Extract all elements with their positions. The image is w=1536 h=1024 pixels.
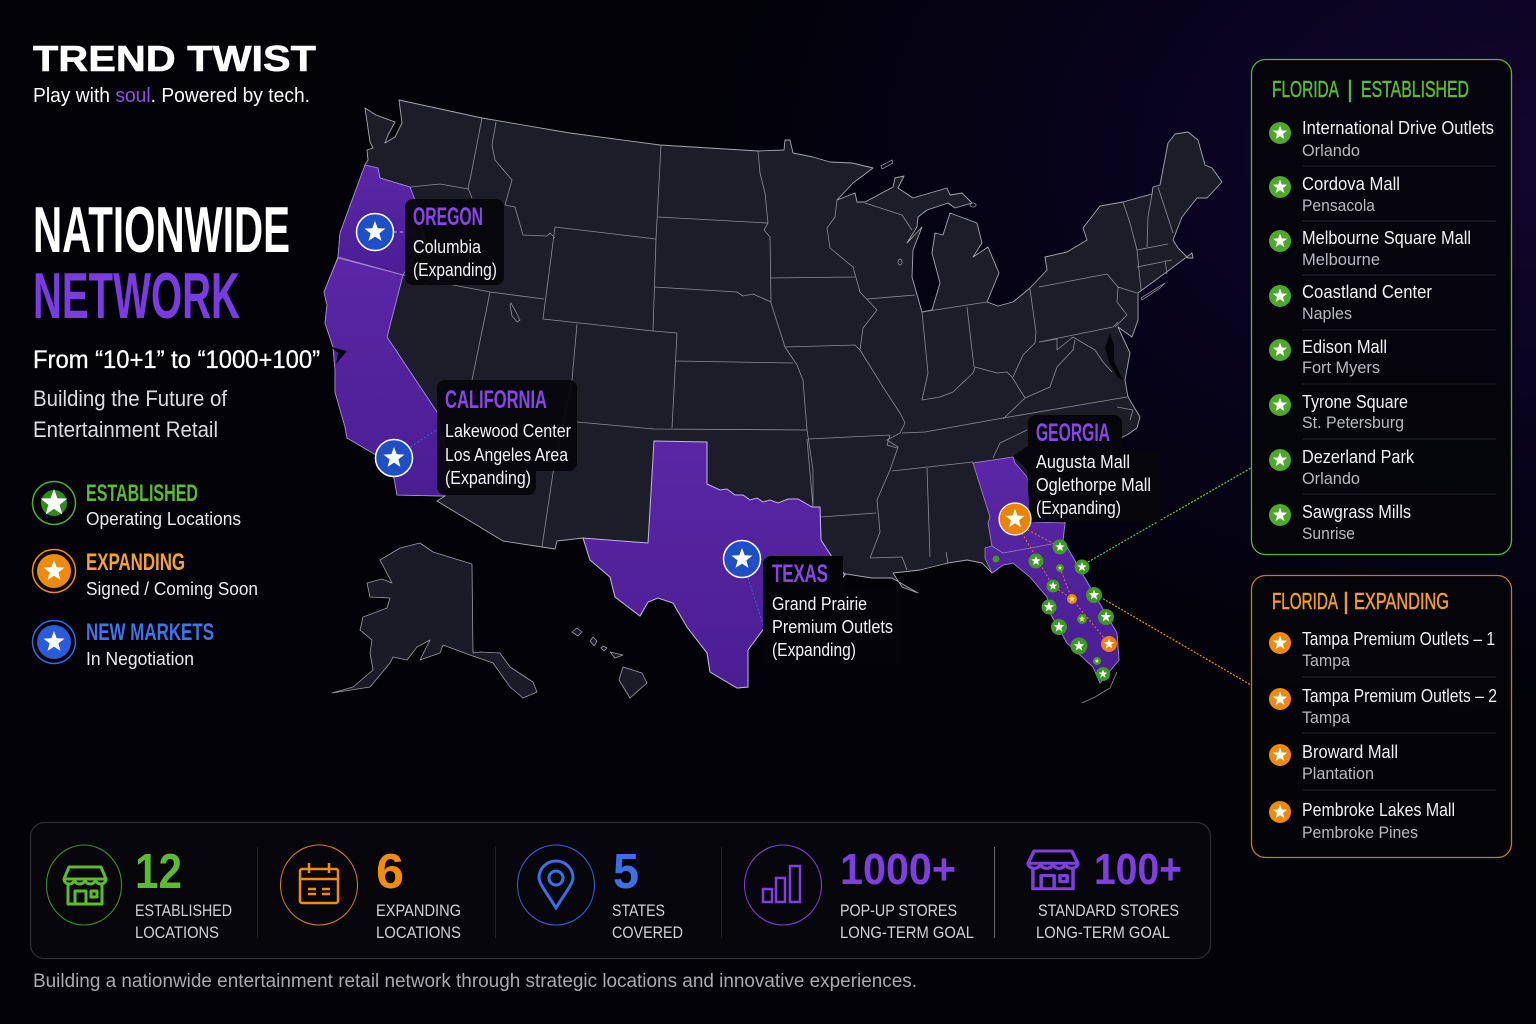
San Francisco bay notch — [331, 347, 347, 364]
legend item: expanding — [32, 549, 258, 599]
pin: Texas — [724, 540, 760, 578]
location list: Sunrise — [1302, 524, 1355, 543]
stat: states covered — [518, 845, 683, 942]
callout: California: (Expanding) — [445, 468, 531, 488]
callout: California: CALIFORNIA — [445, 386, 547, 414]
title: Nationwide Network — [33, 193, 290, 332]
callout: Oregon — [405, 199, 504, 285]
panel: Florida established — [1252, 60, 1512, 554]
location list: Coastland Center — [1302, 282, 1432, 302]
Chesapeake Bay — [1105, 333, 1124, 380]
location list: Dezerland Park — [1302, 447, 1415, 467]
stat: states covered: COVERED — [612, 923, 683, 942]
stat: states covered: STATES — [612, 901, 665, 920]
location list: Melbourne Square Mall — [1302, 228, 1471, 248]
stat: standard stores goal — [1028, 845, 1182, 942]
California state highlight — [324, 258, 450, 496]
location list: Cordova Mall — [1302, 174, 1400, 194]
panel heading: | — [1347, 76, 1353, 102]
stats panel — [30, 822, 1210, 958]
Georgia and Florida state highlight — [973, 457, 1119, 683]
callout: California: Los Angeles Area — [445, 445, 569, 465]
callout: Oregon: OREGON — [413, 203, 483, 231]
stat: expanding locations: 6 — [376, 845, 404, 899]
subtitle: From “10+1” to “1000+100” — [33, 346, 320, 374]
title: Nationwide Network: NATIONWIDE — [33, 193, 290, 266]
location list: Tampa — [1302, 708, 1351, 727]
title: Nationwide Network: NETWORK — [33, 259, 240, 332]
location list: Tampa — [1302, 651, 1351, 670]
legend item: established — [32, 480, 241, 529]
pin: Oregon — [356, 214, 394, 250]
panel heading: FLORIDA — [1272, 588, 1338, 614]
land mass — [324, 100, 1222, 688]
row icons — [1269, 122, 1291, 526]
stat: pop-up stores goal: LONG-TERM GOAL — [840, 923, 974, 942]
Texas state highlight — [583, 441, 845, 688]
state borders — [378, 118, 1173, 570]
callout: Georgia: Augusta Mall — [1036, 452, 1130, 472]
location list: Naples — [1302, 304, 1352, 323]
subtitle: Building the Future of — [33, 386, 228, 411]
location list: International Drive Outlets — [1302, 118, 1494, 138]
panel heading — [1272, 76, 1469, 102]
subtitle — [33, 346, 320, 442]
location list: Tyrone Square — [1302, 392, 1408, 412]
subtitle: Entertainment Retail — [33, 417, 218, 442]
logo: Trend Twist: Play with soul. Powered by tech. — [33, 85, 310, 107]
stat: pop-up stores goal: 1000+ — [840, 845, 956, 894]
stat: expanding locations: EXPANDING — [376, 901, 461, 920]
panel heading: FLORIDA — [1272, 76, 1339, 102]
pin: California — [376, 440, 412, 476]
panel heading: ESTABLISHED — [1361, 76, 1469, 102]
location list — [1302, 629, 1497, 842]
pin: Georgia — [999, 503, 1031, 535]
callout: Texas: Grand Prairie — [772, 594, 867, 614]
lakes and inlets — [510, 160, 1165, 703]
footer text: Building a nationwide entertainment retail network through strategic locations and innovative experiences. — [33, 971, 917, 992]
icon: calendar — [300, 863, 338, 903]
callout: Texas — [763, 556, 900, 665]
stat: standard stores goal: STANDARD STORES — [1038, 901, 1179, 920]
panel heading: EXPANDING — [1354, 588, 1449, 614]
legend item: established: ESTABLISHED — [86, 480, 198, 507]
stat: pop-up stores goal: POP-UP STORES — [840, 901, 957, 920]
stat: established locations: 12 — [135, 845, 182, 899]
Alaska — [332, 543, 537, 698]
legend item: established: Operating Locations — [86, 509, 241, 529]
location list: Orlando — [1302, 141, 1360, 160]
callout: California — [437, 380, 577, 495]
Florida location pins — [992, 540, 1117, 681]
icon: map pin — [539, 861, 573, 908]
location list: Sawgrass Mills — [1302, 502, 1411, 522]
location list: Pembroke Pines — [1302, 823, 1418, 842]
stat: expanding locations — [280, 845, 461, 942]
location list: Pembroke Lakes Mall — [1302, 800, 1455, 820]
location list: Plantation — [1302, 764, 1374, 783]
stat: expanding locations: LOCATIONS — [376, 923, 461, 942]
legend item: new markets: NEW MARKETS — [86, 619, 214, 646]
callout: Oregon: (Expanding) — [413, 260, 497, 280]
location list: Fort Myers — [1302, 358, 1380, 377]
callout: Oregon: Columbia — [413, 237, 482, 257]
icon: bar chart — [763, 866, 800, 902]
callout: Texas: Premium Outlets — [772, 617, 893, 637]
location list: St. Petersburg — [1302, 413, 1404, 432]
Hawaii — [572, 628, 647, 698]
legend — [32, 480, 258, 669]
stat: standard stores goal: LONG-TERM GOAL — [1036, 923, 1170, 942]
stat: established locations — [46, 845, 232, 942]
location list: Tampa Premium Outlets – 1 — [1302, 629, 1495, 649]
legend item: expanding: Signed / Coming Soon — [86, 579, 258, 599]
logo: Trend Twist: TREND TWIST — [33, 38, 316, 79]
callout: Texas: TEXAS — [772, 560, 828, 588]
logo: Trend Twist — [33, 38, 316, 107]
panel: Florida expanding — [1252, 576, 1512, 858]
location list: Tampa Premium Outlets – 2 — [1302, 686, 1497, 706]
legend item: new markets — [32, 619, 214, 669]
location list: Pensacola — [1302, 196, 1375, 215]
stat: established locations: LOCATIONS — [135, 923, 219, 942]
Oregon state highlight — [338, 165, 425, 275]
location list: Edison Mall — [1302, 337, 1387, 357]
callout: California: Lakewood Center — [445, 421, 571, 441]
legend item: expanding: EXPANDING — [86, 549, 185, 576]
stat: pop-up stores goal — [744, 845, 974, 942]
location list — [1302, 118, 1494, 543]
location list: Melbourne — [1302, 250, 1380, 269]
callout: Georgia: Oglethorpe Mall — [1036, 475, 1151, 495]
panel heading: | — [1343, 588, 1349, 614]
panel heading — [1272, 588, 1449, 614]
location list: Orlando — [1302, 469, 1360, 488]
callout: Texas: (Expanding) — [772, 640, 856, 660]
stat: established locations: ESTABLISHED — [135, 901, 232, 920]
callout: Georgia: (Expanding) — [1036, 498, 1121, 518]
location list: Broward Mall — [1302, 742, 1398, 762]
connector lines — [394, 232, 1251, 685]
legend item: new markets: In Negotiation — [86, 649, 194, 669]
callout: Georgia — [1013, 415, 1160, 522]
stat: standard stores goal: 100+ — [1094, 845, 1182, 894]
US map — [324, 100, 1222, 703]
callout: Georgia: GEORGIA — [1036, 419, 1110, 447]
stat: states covered: 5 — [613, 845, 639, 899]
row icons — [1269, 632, 1291, 823]
